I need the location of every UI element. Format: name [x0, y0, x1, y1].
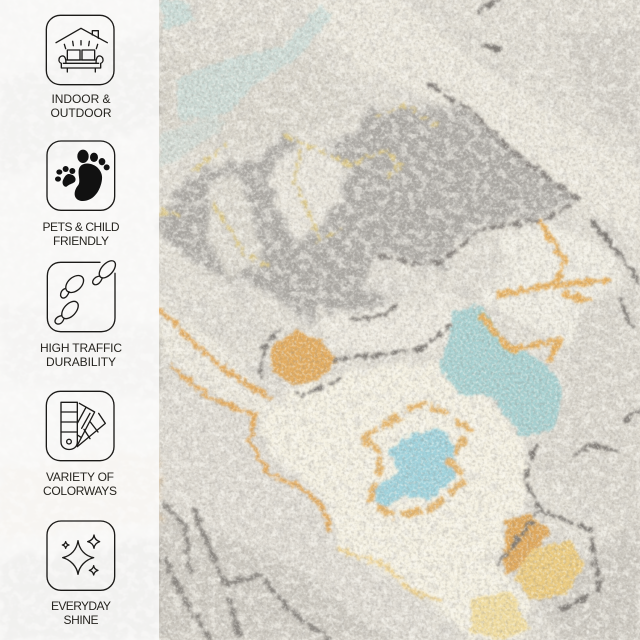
- feature: indoor and outdoor: [46, 15, 114, 120]
- orange details: [272, 330, 338, 385]
- feature: high traffic durability: [40, 258, 122, 369]
- label: variety of colorways: VARIETY OF: [46, 470, 114, 484]
- icon: sparkles: [47, 521, 115, 590]
- right cream knot: [480, 220, 625, 350]
- label: everyday shine: EVERYDAY: [51, 599, 111, 613]
- icon: footprints: [47, 258, 118, 332]
- label: indoor and outdoor: INDOOR &: [52, 92, 110, 106]
- dark outlines: [375, 85, 578, 265]
- teal motifs: [160, 0, 195, 30]
- icon: colour swatch fan: [46, 391, 114, 461]
- feature: pets and child friendly: [42, 141, 120, 248]
- left translucent white panel: [0, 0, 159, 640]
- feature: variety of colorways: [43, 391, 117, 498]
- bottom-left field: [160, 370, 430, 640]
- grey medallion: [160, 103, 577, 320]
- feature: everyday shine: [47, 521, 115, 627]
- label: everyday shine: SHINE: [64, 613, 98, 627]
- lower-right woven field: [530, 260, 640, 530]
- large cream blob: [260, 363, 527, 640]
- label: high traffic durability: DURABILITY: [46, 355, 116, 369]
- label: pets and child friendly: PETS & CHILD: [42, 220, 120, 234]
- label: pets and child friendly: FRIENDLY: [53, 234, 109, 248]
- cream patches: [270, 135, 345, 245]
- left rug colour continuation: [0, 450, 160, 540]
- icon: paw and foot print: [47, 141, 115, 210]
- orange outlines: [160, 310, 270, 398]
- pale cream lattice upper area: [300, 0, 640, 240]
- yellow dotted outline: [160, 135, 400, 265]
- label: high traffic durability: HIGH TRAFFIC: [40, 341, 122, 355]
- label: indoor and outdoor: OUTDOOR: [50, 106, 112, 120]
- label: variety of colorways: COLORWAYS: [43, 484, 117, 498]
- icon: house with sofa: [46, 15, 114, 85]
